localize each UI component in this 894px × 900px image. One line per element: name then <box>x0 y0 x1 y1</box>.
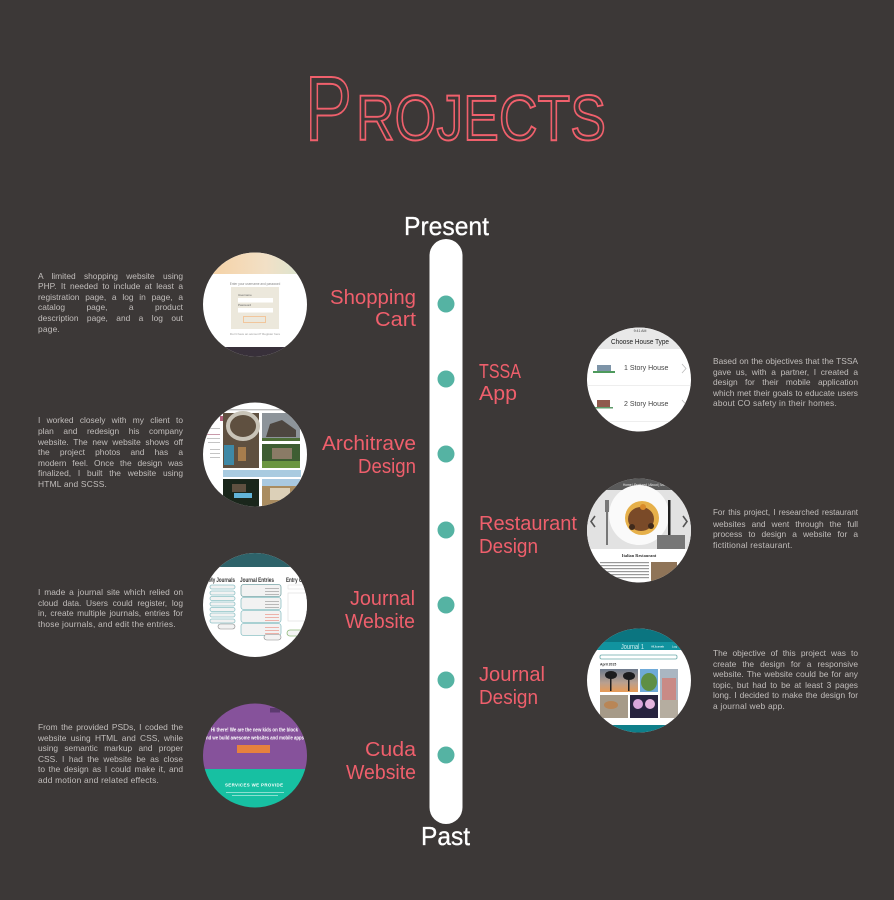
text: architrave description: the project photos and has a <box>38 447 183 457</box>
label: tssa app <box>479 361 522 405</box>
screenshot: architrave design <box>203 402 307 506</box>
screenshot: journal design: All Journals <box>651 644 664 648</box>
label: journal design: Design <box>479 687 538 709</box>
text: restaurant description <box>713 508 858 550</box>
label: journal website: Journal <box>350 588 415 610</box>
text: cuda description <box>38 722 183 785</box>
text: restaurant description: websites and went through the full <box>713 519 858 529</box>
screenshot: cuda website <box>203 704 307 808</box>
label: cuda website: Cuda <box>365 739 417 761</box>
text: journal design description: website. The website could be for any <box>713 669 858 679</box>
text: shopping cart description: description page, and a log out <box>38 313 183 323</box>
label: shopping cart: Shopping <box>330 287 416 309</box>
text: cuda description: using semantic markup and proper <box>38 743 183 753</box>
screenshot: shopping cart: Password <box>238 303 252 307</box>
text: shopping cart description <box>38 271 184 334</box>
label: cuda website: Website <box>346 762 416 784</box>
screenshot: shopping cart: Username <box>238 293 252 297</box>
screenshot: tssa app: 1 Story House <box>624 365 668 372</box>
label: journal website <box>345 588 415 633</box>
label: journal design <box>479 664 545 709</box>
screenshot: journal design <box>587 628 691 732</box>
heading: past: Past <box>421 821 471 851</box>
label: tssa app: App <box>479 383 517 405</box>
text: journal design description: create the design for a responsive <box>713 659 858 669</box>
screenshot: journal design: April 2015 <box>600 662 616 666</box>
text: shopping cart description: page. <box>38 324 60 334</box>
screenshot: journal website: My Journals <box>209 578 235 584</box>
label: cuda website <box>346 739 417 784</box>
screenshot: tssa app <box>587 328 691 432</box>
title <box>305 58 606 160</box>
text: restaurant description: process to design a website for a <box>713 529 858 539</box>
text: architrave description: modern feel. Once the design was <box>38 458 183 468</box>
text: architrave description: finalized, I built the website using <box>38 468 183 478</box>
text: architrave description: HTML and SCSS. <box>38 479 107 489</box>
label: journal design: Journal <box>479 664 545 686</box>
text: cuda description: website using HTML and CSS, while <box>38 733 183 743</box>
label: shopping cart: Cart <box>375 309 416 331</box>
text: cuda description: to the design as I could make it, and <box>38 764 183 774</box>
text: cuda description: From the provided PSDs, I coded the <box>38 722 183 732</box>
text: tssa description: about CO safety in their homes. <box>713 398 837 408</box>
screenshot: cuda website: SERVICES WE PROVIDE <box>225 782 283 788</box>
text: restaurant description: fictitional restaurant. <box>713 540 793 550</box>
label: restaurant design: Design <box>479 536 538 558</box>
text: tssa description: design for their mobile application <box>713 377 858 387</box>
screenshot: restaurant design: Home | Featured | About | Menu | Res <box>623 483 677 487</box>
label: restaurant design <box>479 513 577 558</box>
screenshot: journal design: Journal 1 <box>621 644 644 651</box>
timeline spine <box>430 239 462 824</box>
timeline dots <box>438 296 454 764</box>
text: journal design description: a journal web app. <box>713 701 785 711</box>
screenshot: cuda website: Hi there! We are the new kids on the block <box>211 728 299 734</box>
screenshot: shopping cart <box>203 252 307 356</box>
title: P <box>305 58 352 160</box>
text: journal website description <box>38 587 183 629</box>
screenshot: shopping cart: Enter your username and password <box>230 282 280 286</box>
text: journal website description: in, create multiple journals, entries for <box>38 608 183 618</box>
text: journal website description: I made a journal site which relied on <box>38 587 183 597</box>
text: tssa description: which met their goals to educate users <box>713 388 858 398</box>
screenshot: tssa app: 9:41 AM <box>634 329 647 333</box>
text: architrave description <box>38 415 184 489</box>
text: journal website description: cloud data. Users could register, log <box>38 598 183 608</box>
label: shopping cart <box>330 287 416 331</box>
text: journal design description: topic, but had to be at least 3 pages <box>713 680 858 690</box>
screenshot: journal website: Journal Entries <box>240 578 275 584</box>
text: shopping cart description: registration page, a log in page, a <box>38 292 183 302</box>
text: architrave description: plan and redesign his company <box>38 426 183 436</box>
screenshot: restaurant design <box>587 478 691 582</box>
title: ROJECTS <box>356 82 606 154</box>
text: architrave description: I worked closely with my client to <box>38 415 183 425</box>
text: architrave description: website. The new website shows off <box>38 437 183 447</box>
label: tssa app: TSSA <box>479 361 522 383</box>
text: journal design description <box>713 648 858 711</box>
label: journal website: Website <box>345 611 415 633</box>
text: tssa description: gave us, with a partner, I created a <box>713 367 858 377</box>
screenshot: cuda website: nd we build awesome websites and mobile apps <box>206 736 304 742</box>
label: restaurant design: Restaurant <box>479 513 577 535</box>
screenshot: restaurant design: Italian Restaurant <box>622 553 657 558</box>
screenshot: tssa app: 2 Story House <box>624 401 668 408</box>
screenshot: shopping cart: Don't have an account? Register here <box>230 332 280 336</box>
text: cuda description: add motion and related effects. <box>38 775 159 785</box>
screenshot: journal website: Entry Content <box>286 578 316 584</box>
heading: present: Present <box>404 211 490 241</box>
text: restaurant description: For this project, I researched restaurant <box>713 508 858 517</box>
text: cuda description: CSS. I had the website be as close <box>38 754 183 764</box>
text: shopping cart description: A limited shopping website using <box>38 271 183 281</box>
screenshot: journal design: Log <box>672 644 677 648</box>
screenshot: journal website <box>203 553 307 657</box>
text: journal website description: those journals, and edit the entries. <box>38 619 176 629</box>
label: architrave design: Architrave <box>322 433 416 455</box>
text: tssa description <box>713 356 858 408</box>
text: tssa description: Based on the objectives that the TSSA <box>713 356 858 366</box>
screenshot: tssa app: Choose House Type <box>611 337 669 346</box>
text: journal design description: The objective of this project was to <box>713 648 858 658</box>
label: architrave design <box>322 433 416 478</box>
text: shopping cart description: PHP. It needed to include at least a <box>38 281 183 291</box>
text: journal design description: long. I decided to make the design for <box>713 690 858 700</box>
label: architrave design: Design <box>358 456 416 478</box>
text: shopping cart description: catalog page, a product <box>38 302 183 312</box>
